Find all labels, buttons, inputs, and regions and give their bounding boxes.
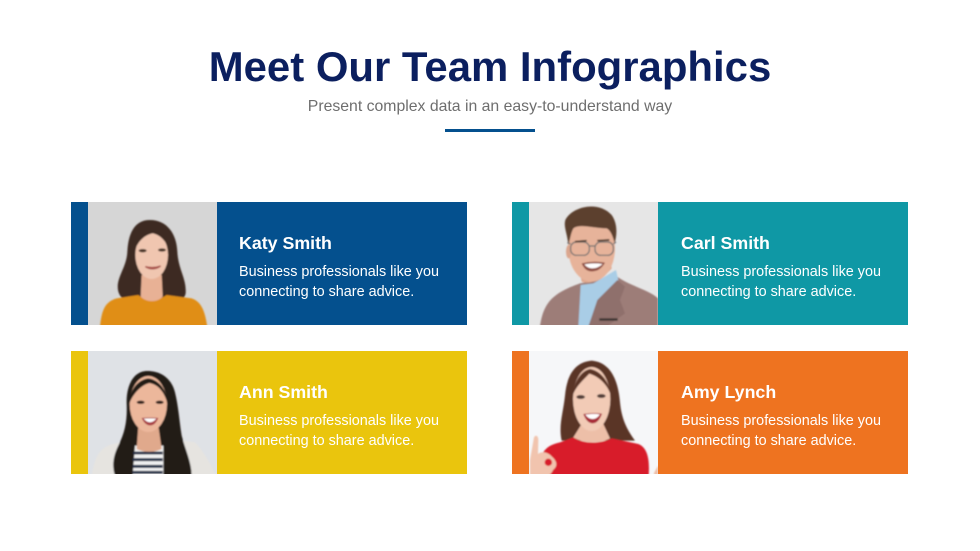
description [681,264,881,300]
description: Business professionals like you [681,264,881,280]
description: Business professionals like you [239,413,439,429]
accent strip [512,202,529,325]
description: connecting to share advice. [239,284,414,300]
description: Business professionals like you [681,413,881,429]
info block [217,351,467,474]
title underline [445,129,535,132]
info block [217,202,467,325]
portrait: Amy Lynch [529,351,658,474]
title: Meet Our Team Infographics [209,43,771,90]
accent strip [512,351,529,474]
portrait: Carl Smith [529,202,658,325]
description [239,264,439,300]
description: connecting to share advice. [681,432,856,448]
portrait: Ann Smith [88,351,217,474]
name: Amy Lynch [681,382,776,402]
name: Ann Smith [239,382,328,402]
panel: Ann Smith [71,351,467,474]
name: Carl Smith [681,233,770,253]
description [681,413,881,448]
portrait: Katy Smith [88,202,217,325]
name: Katy Smith [239,233,332,253]
subtitle: Present complex data in an easy-to-understand way [308,98,672,115]
info block [658,351,908,474]
accent strip [71,202,88,325]
description: Business professionals like you [239,264,439,280]
description: connecting to share advice. [239,432,414,448]
panel: Carl Smith [512,202,908,325]
info block [658,202,908,325]
accent strip [71,351,88,474]
description [239,413,439,448]
panel: Amy Lynch [512,351,908,474]
description: connecting to share advice. [681,284,856,300]
panel: Katy Smith [71,202,467,325]
